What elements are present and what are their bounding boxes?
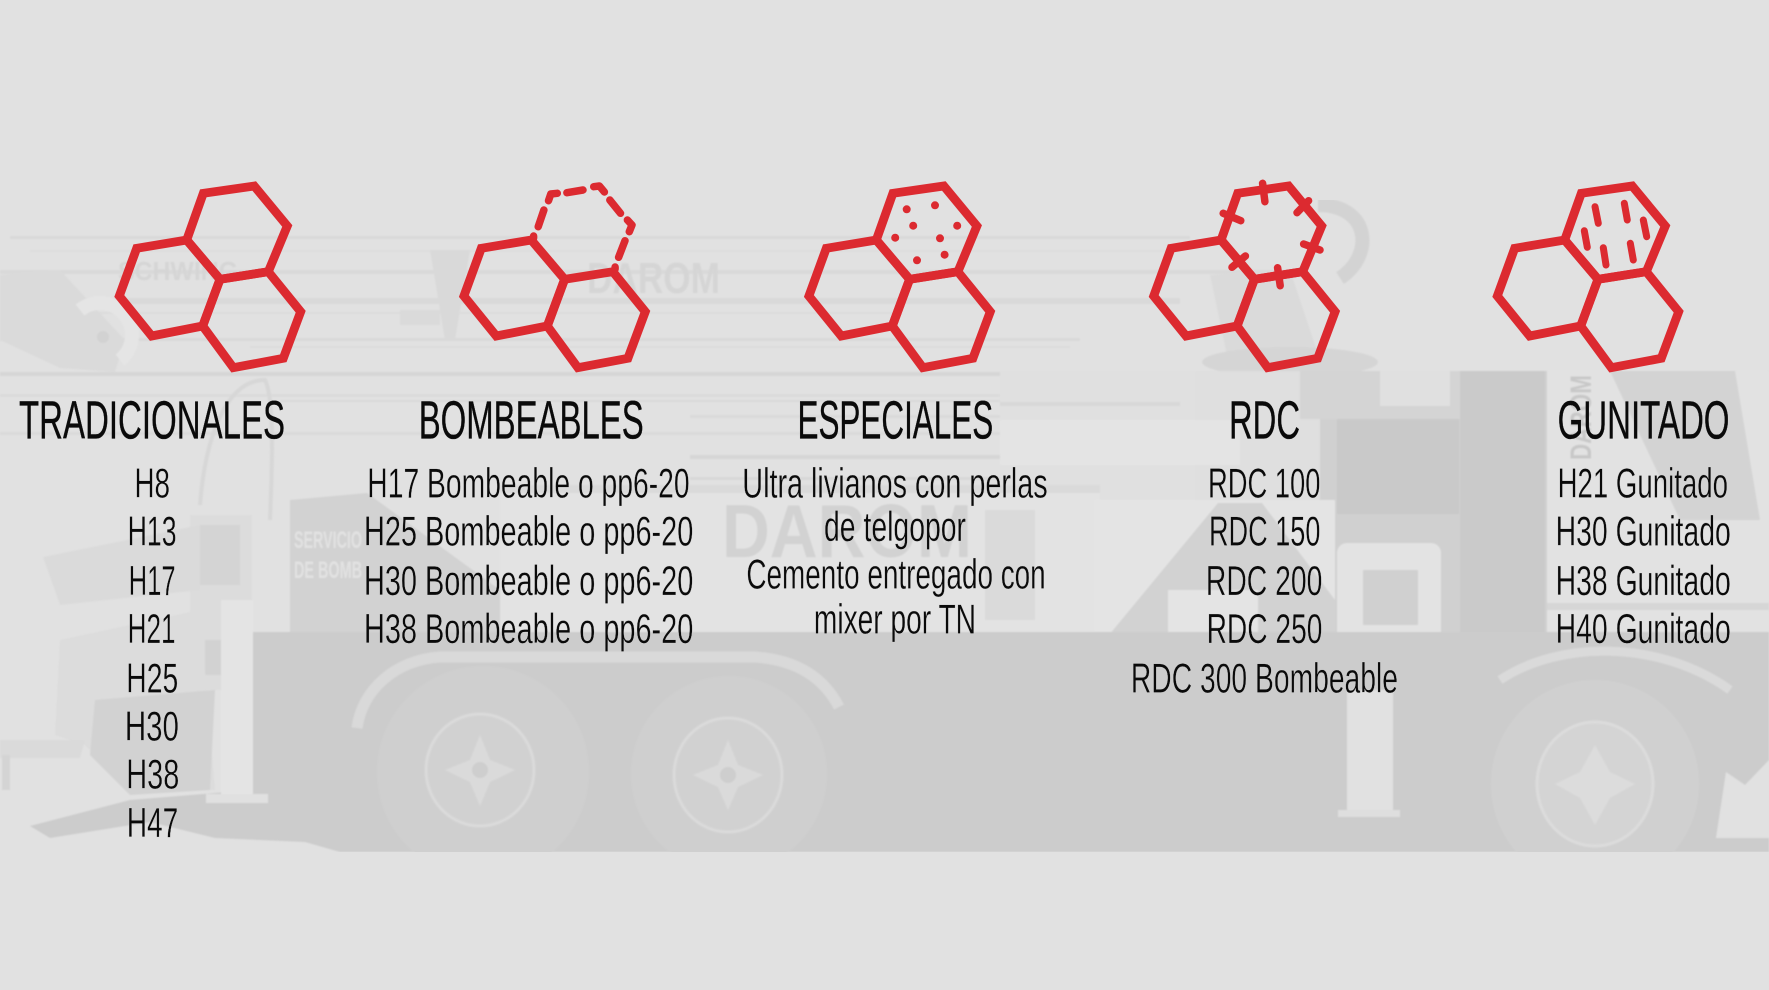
background photo: concrete pump truck: DE BOMB	[294, 557, 362, 584]
list: especiales: de telgopor	[824, 503, 966, 550]
chassis	[30, 632, 1769, 852]
radiator	[1337, 419, 1459, 514]
rear fender	[357, 657, 839, 728]
list: tradicionales: H17	[129, 557, 176, 604]
lettering on boom: SCHWING	[118, 256, 238, 286]
front wheel	[1535, 720, 1655, 848]
list: tradicionales: H30	[125, 703, 179, 750]
list: bombeables: H38 Bombeable o pp6-20	[364, 605, 693, 652]
background photo: concrete pump truck: DAROM	[587, 254, 720, 303]
list: especiales	[742, 459, 1048, 642]
boom joint left	[0, 270, 125, 372]
icon: gunitado hexagons	[1497, 186, 1679, 368]
list: especiales: Ultra livianos con perlas	[742, 459, 1048, 506]
list: tradicionales: H21	[128, 605, 176, 652]
wheel 1	[424, 712, 536, 828]
list: tradicionales: H47	[127, 799, 178, 846]
list: RDC: RDC 300 Bombeable	[1131, 655, 1398, 702]
icon: RDC hexagons	[1154, 186, 1335, 368]
list: RDC	[1131, 459, 1398, 702]
icon: dashed top hexagon	[534, 186, 632, 269]
hopper	[43, 525, 200, 605]
main body dark panel	[290, 493, 500, 633]
panel behind especiales	[500, 490, 1100, 633]
icon: ticks across RDC hexagon	[1223, 183, 1320, 286]
column: RDC	[1131, 390, 1398, 702]
light area behind RDC heading	[1195, 371, 1320, 500]
list: bombeables: H30 Bombeable o pp6-20	[364, 557, 693, 604]
list: bombeables	[364, 459, 693, 652]
tower	[1460, 371, 1545, 821]
heading: RDC: RDC	[1229, 390, 1300, 450]
list: tradicionales	[125, 459, 179, 846]
white rounded tool box	[1337, 543, 1441, 641]
column: bombeables	[364, 390, 693, 652]
heading: bombeables: BOMBEABLES	[419, 390, 644, 450]
column: gunitado	[1556, 390, 1731, 652]
boom tubes	[0, 372, 1000, 479]
list: RDC: RDC 200	[1206, 557, 1322, 604]
background photo: concrete pump truck	[0, 205, 1769, 888]
ground light right of front wheel	[1716, 760, 1769, 838]
cab door	[1547, 371, 1769, 632]
list: RDC: RDC 100	[1208, 459, 1320, 506]
rear outrigger and controls	[190, 515, 252, 690]
body cab fender	[1500, 651, 1730, 690]
boom clamps	[430, 250, 470, 340]
heading: tradicionales: TRADICIONALES	[19, 390, 285, 450]
list: tradicionales: H25	[126, 655, 178, 702]
heading: especiales: ESPECIALES	[798, 390, 993, 450]
list: tradicionales: H13	[128, 508, 177, 555]
background photo: concrete pump truck: DAROM	[722, 489, 972, 573]
wheel 2	[672, 716, 784, 834]
icon: dots inside especiales hexagon	[891, 201, 961, 264]
cab and tower dark area	[1195, 371, 1769, 852]
hand rail	[200, 380, 272, 520]
list: especiales: mixer por TN	[814, 595, 976, 642]
list: especiales: Cemento entregado con	[746, 550, 1046, 597]
list: tradicionales: H38	[126, 750, 179, 798]
background photo: concrete pump truck: DAROM	[1565, 375, 1598, 460]
icon: fibres inside gunitado hexagon	[1584, 203, 1647, 265]
rear outrigger front	[1347, 690, 1393, 812]
chain carrier	[1318, 205, 1362, 278]
list: bombeables: H25 Bombeable o pp6-20	[364, 508, 693, 555]
boom pivot hoses	[1210, 270, 1320, 370]
list: tradicionales: H8	[134, 459, 170, 506]
list: RDC: RDC 250	[1207, 605, 1322, 652]
icon: tradicionales hexagons	[119, 186, 301, 368]
column: tradicionales	[19, 390, 285, 846]
list: bombeables: H17 Bombeable o pp6-20	[367, 459, 690, 506]
list: RDC: RDC 150	[1209, 508, 1320, 555]
icon: bombeables hexagons with dashed top cell	[464, 240, 645, 368]
service lettering: SERVICIO	[294, 527, 362, 554]
white panel with warning triangle	[1194, 500, 1335, 599]
list: gunitado	[1556, 459, 1731, 652]
column: especiales	[742, 390, 1048, 642]
icon: especiales hexagons	[809, 186, 990, 368]
